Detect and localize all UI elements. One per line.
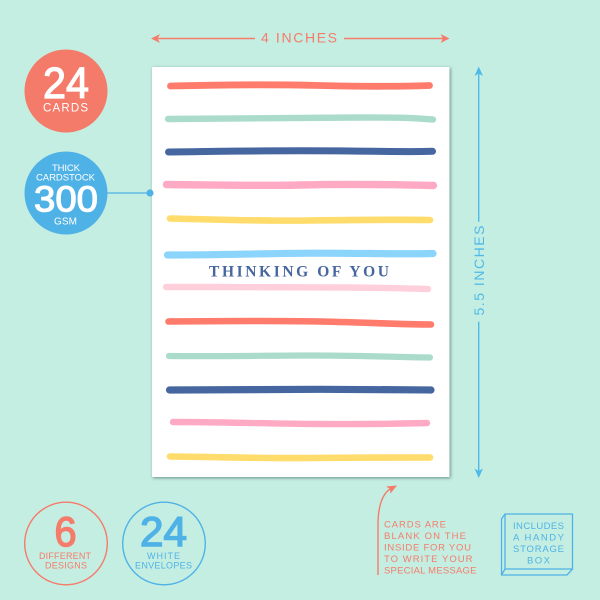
connector from badge to card [107, 189, 154, 197]
width dimension: 4 inches [151, 30, 450, 46]
icon: storage box: BOX [527, 555, 551, 566]
height dimension: 5.5 inches: 5.5 INCHES [471, 226, 487, 316]
badge: 24 white envelopes: ENVELOPES [135, 561, 192, 571]
width dimension: 4 inches: 4 INCHES [261, 30, 337, 46]
badge: 300 gsm cardstock [24, 152, 108, 234]
note: blank inside: BLANK ON THE [384, 531, 466, 542]
curved arrow pointing to card [378, 486, 397, 575]
badge: 300 gsm cardstock: 300 [34, 178, 98, 220]
badge: 6 different designs: DESIGNS [45, 561, 87, 571]
note: blank inside: INSIDE FOR YOU [384, 542, 471, 554]
icon: storage box: A HANDY [513, 533, 565, 544]
badge: 300 gsm cardstock: CARDSTOCK [36, 172, 96, 183]
icon: storage box: INCLUDES [513, 521, 564, 532]
panel: greeting card [152, 67, 450, 477]
icon: storage box: STORAGE [513, 544, 564, 555]
badge: 24 cards: 24 [43, 59, 89, 108]
painted stripes [166, 85, 434, 458]
note: blank inside: CARDS ARE [384, 519, 446, 530]
note: blank inside: SPECIAL MESSAGE [384, 566, 476, 577]
badge: 24 white envelopes: 24 [140, 508, 187, 555]
badge: 300 gsm cardstock: GSM [54, 217, 77, 228]
height dimension: 5.5 inches [471, 66, 487, 478]
badge: 24 cards: CARDS [43, 102, 88, 114]
note: blank inside: TO WRITE YOUR [384, 554, 473, 565]
badge: 24 cards [24, 50, 108, 132]
badge: 6 different designs: 6 [54, 508, 76, 555]
badge: 6 different designs [25, 502, 107, 585]
badge: 24 white envelopes [123, 502, 205, 585]
badge: 24 white envelopes: WHITE [147, 551, 180, 561]
icon: storage box [502, 514, 572, 575]
card sheet [152, 67, 450, 477]
badge: 300 gsm cardstock: THICK [52, 163, 81, 174]
badge: 6 different designs: DIFFERENT [39, 551, 92, 561]
card greeting: THINKING OF YOU [209, 264, 389, 281]
note: blank inside [384, 519, 476, 577]
